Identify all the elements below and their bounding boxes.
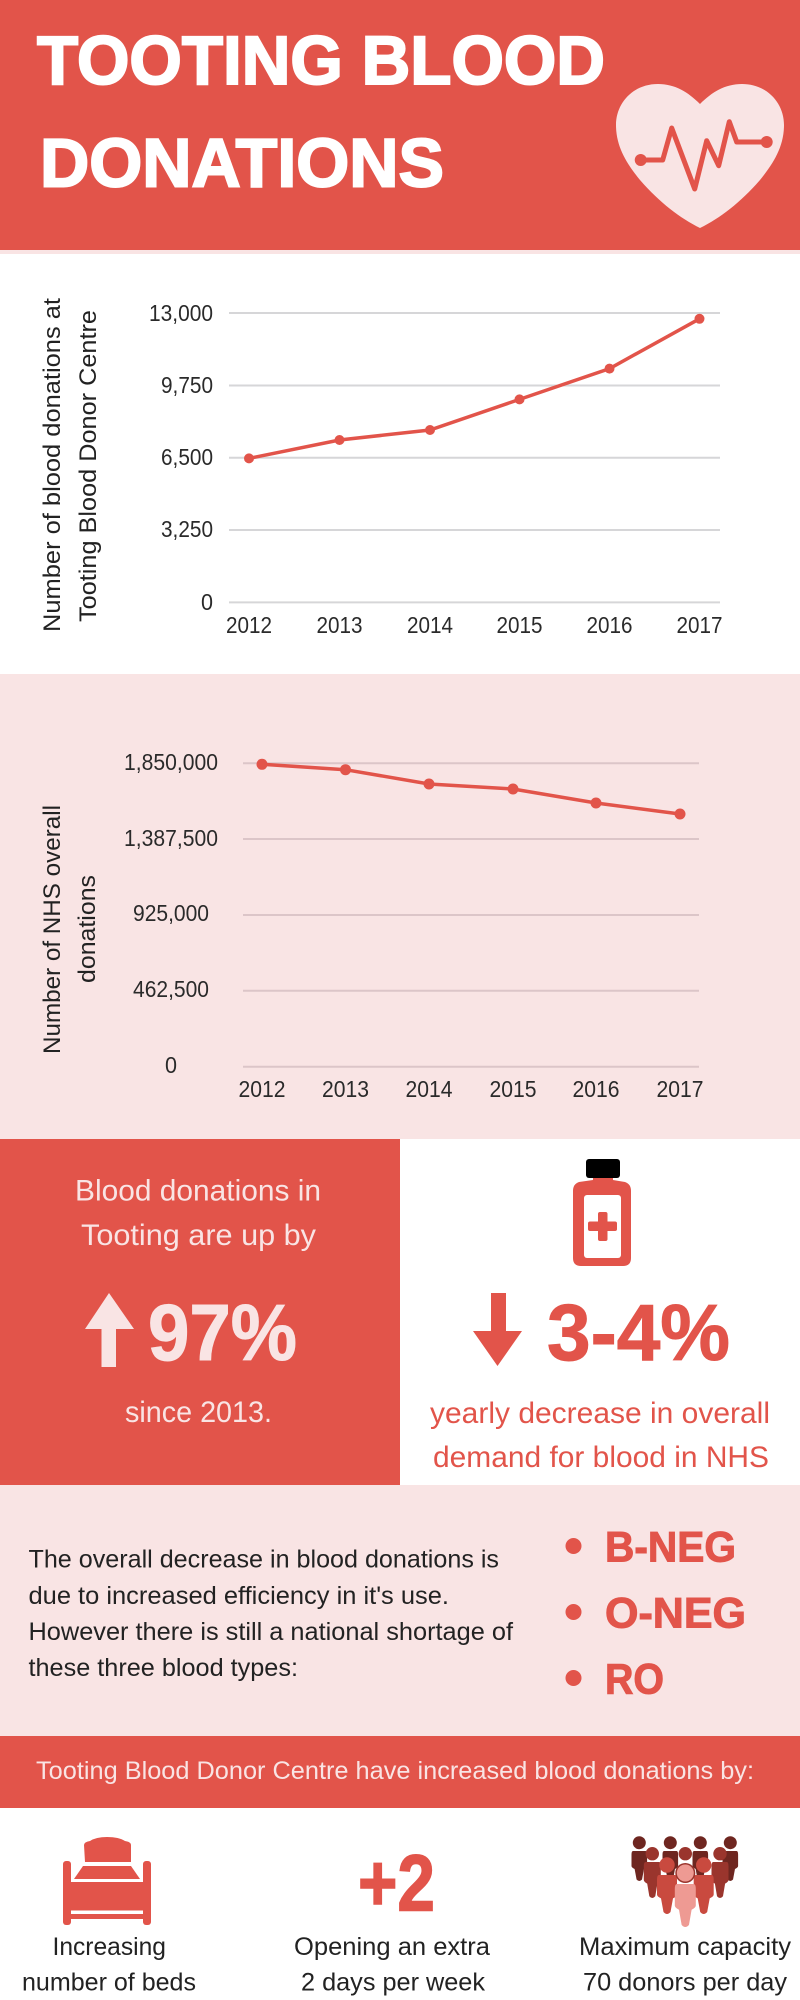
stat: 3-4%: 3-4% xyxy=(547,1288,730,1377)
y axis labels: NHS chart: 925,000 xyxy=(133,900,209,926)
panel: capacity xyxy=(579,1836,792,1997)
title xyxy=(37,22,605,202)
line series: NHS donations xyxy=(256,759,686,820)
x axis labels: Tooting chart: 2017 xyxy=(676,612,722,638)
text: explanation paragraph: these three blood types: xyxy=(28,1654,298,1682)
header banner xyxy=(0,0,800,254)
panel: NHS donations chart xyxy=(0,674,800,1139)
text: yearly decrease: demand for blood in NHS xyxy=(433,1441,769,1474)
y axis labels: Tooting chart: 13,000 xyxy=(149,300,213,326)
icon: heart with pulse xyxy=(616,84,784,228)
text: capacity: Maximum capacity xyxy=(579,1933,792,1961)
text: beds: number of beds xyxy=(22,1969,196,1997)
x axis labels: Tooting chart: 2016 xyxy=(586,612,632,638)
x axis labels: NHS chart: 2013 xyxy=(322,1076,369,1102)
x axis labels: Tooting chart: 2015 xyxy=(496,612,542,638)
text: explanation paragraph: However there is still a national shortage of xyxy=(28,1618,513,1646)
panel: NHS demand down stat xyxy=(401,1139,800,1485)
x axis labels: NHS chart: 2015 xyxy=(490,1076,536,1102)
line series: Tooting donations xyxy=(244,314,704,463)
list: blood types: RO xyxy=(605,1656,664,1704)
text: blood donations intro xyxy=(75,1174,321,1252)
text: beds xyxy=(22,1933,196,1997)
banner: increased donations: Tooting Blood Donor Centre have increased blood donations by: xyxy=(36,1757,754,1785)
x axis labels: NHS chart: 2016 xyxy=(572,1076,620,1102)
text: blood donations intro: Blood donations in xyxy=(75,1174,321,1208)
panel: Tooting donations chart xyxy=(39,298,722,638)
axis title: NHS donations xyxy=(39,805,101,1054)
text: yearly decrease: yearly decrease in overall xyxy=(430,1397,770,1430)
list: blood types xyxy=(566,1524,746,1704)
text: extra days xyxy=(294,1933,490,1997)
panel: extra days xyxy=(294,1839,490,1997)
text: explanation paragraph: The overall decrease in blood donations is xyxy=(28,1546,499,1574)
text: since 2013: since 2013. xyxy=(125,1396,272,1429)
text: extra days: Opening an extra xyxy=(294,1933,490,1961)
y axis labels: NHS chart: 0 xyxy=(165,1052,177,1078)
panel: beds xyxy=(22,1837,196,1997)
x axis labels: Tooting chart: 2013 xyxy=(316,612,362,638)
title: TOOTING BLOOD xyxy=(37,22,605,99)
x axis labels: Tooting chart: 2014 xyxy=(407,612,453,638)
y axis labels: Tooting chart: 6,500 xyxy=(161,444,213,470)
icon: bed xyxy=(63,1837,151,1925)
y axis labels: Tooting chart xyxy=(149,300,213,615)
y axis labels: NHS chart: 462,500 xyxy=(133,976,209,1002)
text: yearly decrease xyxy=(430,1397,770,1474)
x axis labels: Tooting chart xyxy=(226,612,722,638)
list: blood types: O-NEG xyxy=(605,1590,746,1638)
text: explanation paragraph: due to increased efficiency in it's use. xyxy=(28,1582,449,1610)
axis title: Tooting donations: Tooting Blood Donor Centre xyxy=(75,310,102,622)
text: capacity: 70 donors per day xyxy=(583,1969,788,1997)
x axis labels: NHS chart: 2017 xyxy=(656,1076,704,1102)
y axis labels: Tooting chart: 9,750 xyxy=(161,372,213,398)
stat: 97%: 97% xyxy=(148,1288,297,1377)
stat: +2: +2 xyxy=(358,1839,435,1928)
axis title: Tooting donations: Number of blood donations at xyxy=(39,298,66,632)
text: extra days: 2 days per week xyxy=(301,1969,486,1997)
x axis labels: NHS chart xyxy=(238,1076,704,1102)
y axis labels: NHS chart: 1,850,000 xyxy=(124,749,218,775)
icon: group of people xyxy=(632,1836,738,1927)
title: DONATIONS xyxy=(40,124,444,202)
text: beds: Increasing xyxy=(52,1933,166,1961)
y axis labels: NHS chart: 1,387,500 xyxy=(124,825,218,851)
y axis labels: Tooting chart: 3,250 xyxy=(161,516,213,542)
panel: blood type shortage xyxy=(0,1485,800,1736)
list: blood types: B-NEG xyxy=(605,1524,736,1572)
text: explanation paragraph xyxy=(28,1546,513,1682)
x axis labels: NHS chart: 2012 xyxy=(238,1076,286,1102)
y axis labels: Tooting chart: 0 xyxy=(201,589,213,615)
banner: increased donations xyxy=(0,1736,800,1808)
text: capacity xyxy=(579,1933,792,1997)
axis title: NHS donations: donations xyxy=(74,875,101,983)
x axis labels: Tooting chart: 2012 xyxy=(226,612,272,638)
arrow: down xyxy=(473,1293,522,1366)
panel: Tooting up stat xyxy=(0,1139,400,1485)
axis title: Tooting donations xyxy=(39,298,102,632)
axis title: NHS donations: Number of NHS overall xyxy=(39,805,66,1054)
icon: medicine bottle xyxy=(573,1159,631,1266)
x axis labels: NHS chart: 2014 xyxy=(406,1076,453,1102)
text: blood donations intro: Tooting are up by xyxy=(81,1219,316,1252)
arrow: up xyxy=(85,1293,134,1367)
y axis labels: NHS chart xyxy=(124,749,218,1078)
